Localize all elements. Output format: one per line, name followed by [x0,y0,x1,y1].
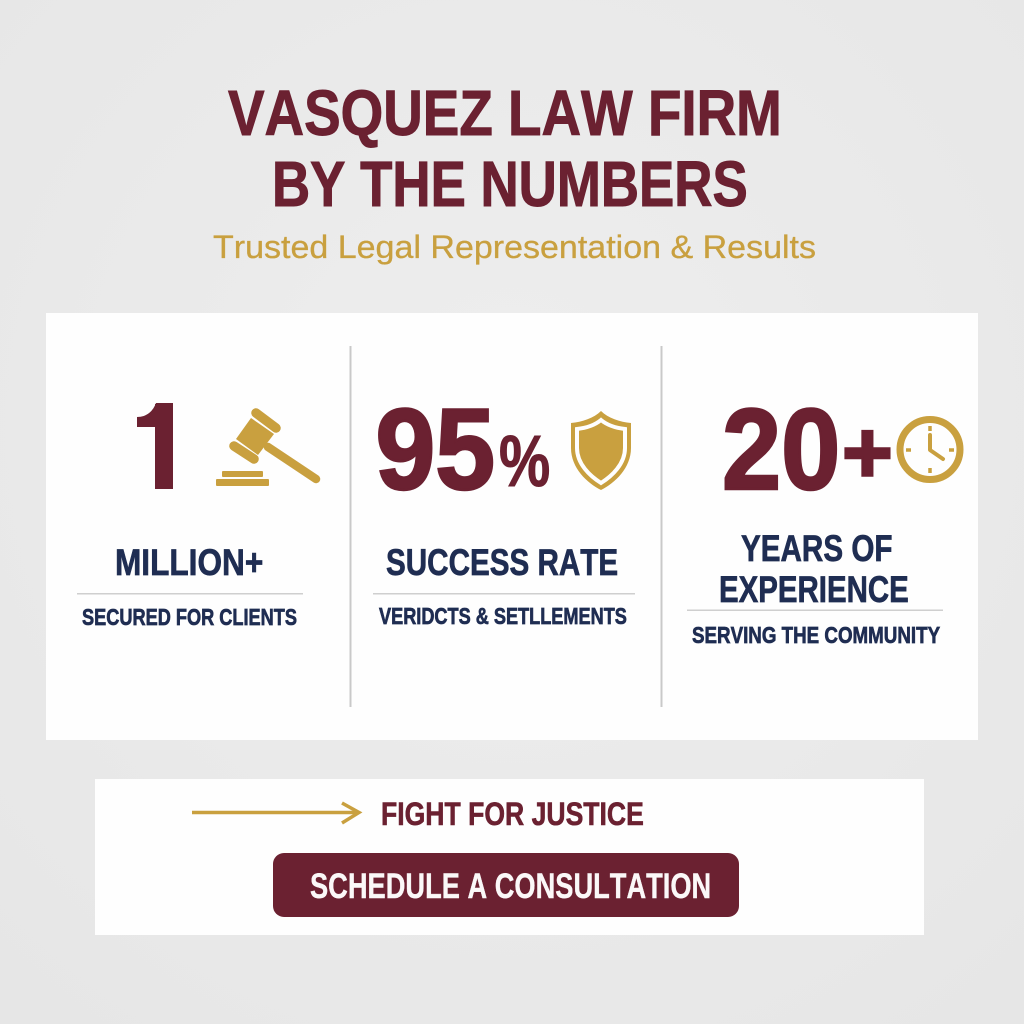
title: BY THE NUMBERS [272,149,748,220]
stat: one million [77,403,320,626]
caption: secured for clients: SECURED FOR CLIENTS [82,605,297,631]
stat: success rate [373,385,635,630]
label: years of experience: YEARS OF [741,529,892,570]
number 95 percent [376,385,550,514]
title [228,77,782,220]
label: years of experience: EXPERIENCE [719,570,909,611]
panel: statistics [46,313,978,740]
label: years of experience [719,529,909,611]
icon: gavel [216,413,316,486]
caption: verdicts and settlements: VERIDCTS & SETLLEMENTS [379,604,627,630]
icon: shield [571,411,631,490]
arrow [192,803,359,823]
subtitle: Trusted Legal Representation & Results [213,229,816,265]
number 95 percent: % [499,421,550,501]
label: success rate: SUCCESS RATE [386,543,618,584]
stat: years of experience [687,386,960,648]
label: million: MILLION+ [115,543,263,584]
caption: serving the community: SERVING THE COMMUNITY [692,623,940,648]
icon: clock [900,420,960,480]
number 20 plus [722,386,893,514]
number 20 plus: + [842,404,893,502]
number 1 [137,403,173,489]
number 95 percent: 95 [376,385,495,514]
tagline: fight for justice: FIGHT FOR JUSTICE [381,797,644,833]
title: VASQUEZ LAW FIRM [228,77,782,149]
button: schedule a consultation: SCHEDULE A CONSULTATION [310,867,711,906]
button: schedule a consultation [273,853,739,917]
panel: call to action [95,779,924,935]
number 20 plus: 20 [722,386,840,514]
number 1: 1 [127,377,197,516]
